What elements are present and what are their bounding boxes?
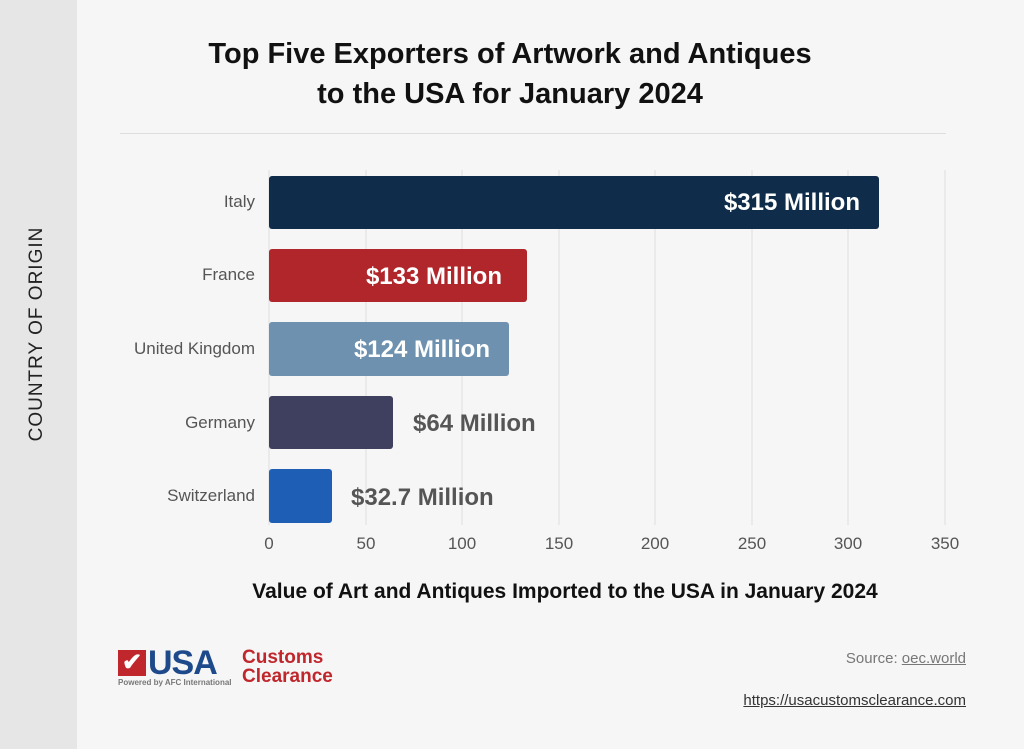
- logo: ✔: [122, 649, 142, 676]
- logo: USA: [148, 644, 217, 682]
- logo: Clearance: [242, 666, 333, 687]
- axis title: country of origin: COUNTRY OF ORIGIN: [26, 227, 47, 441]
- bar chart: 300: [834, 534, 862, 553]
- title: Top Five Exporters of Artwork and Antiques: [208, 38, 812, 70]
- source: Source: oec.world: [846, 650, 966, 667]
- url: https://usacustomsclearance.com: [743, 692, 966, 709]
- logo: Customs: [242, 647, 323, 668]
- bar chart: Germany: [185, 413, 255, 432]
- bar chart: $133 Million: [366, 263, 502, 290]
- x-axis title: Value of Art and Antiques Imported to the USA in January 2024: [252, 580, 878, 603]
- bar chart: Switzerland: [167, 486, 255, 505]
- bar chart: 0: [264, 534, 274, 553]
- bar chart: $64 Million: [413, 410, 536, 437]
- bar chart: $32.7 Million: [351, 484, 494, 511]
- bar chart: 350: [931, 534, 959, 553]
- bar chart: 150: [545, 534, 573, 553]
- logo: Powered by AFC International: [118, 678, 232, 687]
- bar chart: France: [202, 265, 255, 284]
- bar chart: United Kingdom: [134, 339, 255, 358]
- bar chart: 250: [738, 534, 766, 553]
- left strip: [0, 0, 77, 749]
- bar chart: 50: [357, 534, 375, 553]
- bar chart: $124 Million: [354, 336, 490, 363]
- title: [208, 38, 812, 110]
- bar chart: 100: [448, 534, 476, 553]
- logo: [118, 644, 333, 687]
- bar chart: $315 Million: [724, 189, 860, 216]
- title: to the USA for January 2024: [317, 78, 703, 110]
- bar chart: 200: [641, 534, 669, 553]
- bar chart: Italy: [224, 192, 255, 211]
